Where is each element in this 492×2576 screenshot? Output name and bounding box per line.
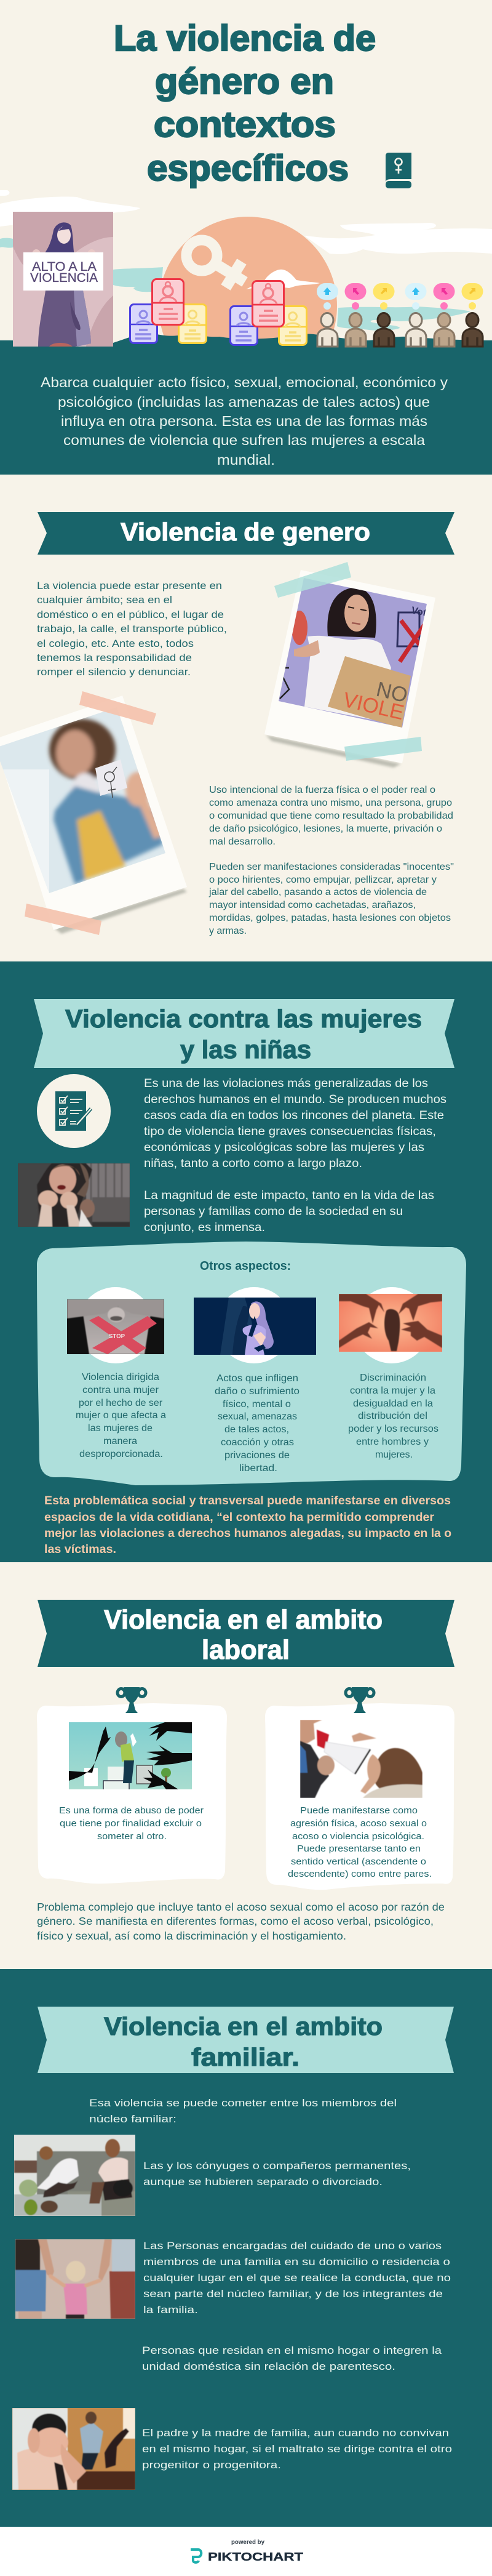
panel: violencia en el ambito laboral <box>37 1600 454 1941</box>
text block: violaciones: económicas y psicológicas sobre las mujeres y las <box>144 1141 424 1154</box>
photo: polaroid woman with no violence sign <box>264 562 437 768</box>
text block: definicion: de daño psicológico, lesiones, la muerte, privación o <box>209 824 442 834</box>
caption: desigualdad en la <box>353 1398 433 1409</box>
clouds and background bands <box>0 190 492 331</box>
caption: coacción y otras <box>221 1437 294 1448</box>
title <box>114 18 376 188</box>
person 4 with bubble <box>405 283 427 347</box>
banner heading <box>34 999 454 1068</box>
caption: las mujeres de <box>88 1423 153 1434</box>
caption: Actos que infligen <box>216 1373 298 1384</box>
icon group: identity cards right <box>230 281 308 345</box>
caption: agresión física, acoso sexual o <box>290 1818 427 1829</box>
person 2 with bubble <box>344 283 367 347</box>
text block: padre y madre: en el mismo hogar, si el maltrato se dirige contra el otro <box>142 2443 452 2455</box>
text block: violaciones: La magnitud de este impacto, tanto en la vida de las <box>144 1189 434 1202</box>
text block: violaciones: niñas, tanto a corto como a largo plazo. <box>144 1157 362 1170</box>
text block: violaciones: tipo de violencia tiene graves consecuencias físicas, <box>144 1125 436 1138</box>
person 1 with bubble <box>317 283 338 347</box>
caption <box>59 1805 204 1842</box>
banner heading: Violencia en el ambito <box>104 2012 383 2040</box>
text block: definicion: y armas. <box>209 926 247 936</box>
person 5 with bubble <box>433 283 455 347</box>
banner heading: familiar. <box>191 2043 300 2071</box>
footer: powered by piktochart <box>0 2527 492 2576</box>
caption: entre hombres y <box>356 1437 429 1447</box>
intro text: influya en otra persona. Esta es una de las formas más <box>61 413 427 429</box>
text block: violaciones: personas y familias como de la sociedad en su <box>144 1205 403 1218</box>
photo: polaroid woman with no violence sign: Vot <box>410 605 427 619</box>
caption: Puede manifestarse como <box>300 1805 418 1816</box>
caption: descendente) como entre pares. <box>288 1869 432 1879</box>
text block: ambitos <box>37 580 227 678</box>
intro text: Abarca cualquier acto físico, sexual, emocional, económico y <box>41 374 448 390</box>
text block: personas encargadas: la familia. <box>143 2304 198 2316</box>
photo: polaroid woman with no violence sign: NO <box>374 678 410 707</box>
text block: problema complejo: físico y sexual, así como la discriminación y el hostigamiento. <box>37 1930 346 1942</box>
poster: alto a la violencia: ALTO A LA <box>32 260 97 274</box>
photo: stop gagged woman <box>67 1299 164 1354</box>
photo: polaroid blurred woman with denim jacket <box>0 691 187 935</box>
text block: definicion: como amenaza contra uno mismo, una persona, grupo <box>209 798 452 808</box>
card: abuso de poder <box>37 1687 227 1884</box>
title: específicos <box>147 148 349 188</box>
intro text: comunes de violencia que sufren las mujeres a escala <box>63 432 425 448</box>
text block: definicion: mordidas, golpes, patadas, hasta lesiones con objetos <box>209 913 451 923</box>
caption: de tales actos, <box>224 1424 289 1435</box>
icon: book with female symbol <box>386 153 411 188</box>
caption: mujer o que afecta a <box>76 1410 166 1421</box>
text block: unidad domestica <box>142 2345 442 2372</box>
caption: acoso o violencia psicológica. <box>292 1831 424 1842</box>
text block: violaciones: conjunto, es inmensa. <box>144 1221 265 1234</box>
ground <box>0 333 492 475</box>
text block: problema complejo: Problema complejo que incluye tanto el acoso sexual como el acoso por razón de <box>37 1901 445 1913</box>
text block: definicion: mal desarrollo. <box>209 837 276 847</box>
caption <box>288 1805 432 1879</box>
caption: Es una forma de abuso de poder <box>59 1805 204 1816</box>
card: agresion <box>265 1687 454 1890</box>
text block: unidad domestica: Personas que residan en el mismo hogar o integren la <box>142 2345 442 2356</box>
banner heading: laboral <box>202 1635 290 1665</box>
panel: hero <box>0 23 492 475</box>
caption: sexual, amenazas <box>218 1411 297 1422</box>
text block: definicion: jalar del cabello, pasando a actos de violencia de <box>208 887 427 897</box>
text block: conyuges <box>143 2160 411 2188</box>
banner heading: Violencia de genero <box>121 518 370 546</box>
text block: definicion: Uso intencional de la fuerza física o el poder real o <box>209 785 435 795</box>
tape bottom <box>25 904 101 935</box>
intro text: psicológico (incluidas las amenazas de tales actos) que <box>58 394 430 410</box>
text block: padre y madre <box>142 2427 452 2471</box>
caption: físico, mental o <box>223 1399 291 1410</box>
intro text: mundial. <box>217 452 275 468</box>
photo: polaroid woman with no violence sign: VIOLE <box>341 688 406 724</box>
caption <box>76 1372 166 1459</box>
caption: privaciones de <box>224 1450 290 1461</box>
photo: crying child covering ears <box>12 2408 135 2490</box>
banner heading: Violencia en el ambito <box>104 1605 383 1635</box>
panel: otros aspectos <box>37 1242 466 1485</box>
text block: personas encargadas: sean parte del núcleo familiar, y de los integrantes de <box>143 2288 443 2300</box>
caption: mujeres. <box>375 1450 413 1460</box>
callout: problematica social: las víctimas. <box>44 1543 116 1556</box>
panel: violencia contra las mujeres y las niñas <box>0 961 492 1562</box>
icon group: people with speech bubbles <box>317 283 483 347</box>
text block: nucleo familiar <box>89 2097 397 2125</box>
caption: manera <box>103 1436 137 1446</box>
text block: padre y madre: El padre y la madre de familia, aun cuando no convivan <box>142 2427 449 2439</box>
illustration: hands reaching toward woman <box>339 1294 442 1352</box>
icon: checklist in circle <box>37 1074 111 1148</box>
caption: que tiene por finalidad excluir o <box>60 1818 202 1829</box>
poster: alto a la violencia <box>13 212 113 347</box>
photo: frightened child <box>18 1163 130 1227</box>
icon: trophy <box>346 1687 374 1713</box>
illustration: office hands <box>69 1722 192 1793</box>
callout: problematica social: Esta problemática social y transversal puede manifestarse en diversos <box>44 1495 451 1507</box>
text block: ambitos: tenemos la responsabilidad de <box>37 652 192 664</box>
callout: problematica social: espacios de la vida cotidiana, “el contexto ha permitido comprender <box>44 1511 435 1524</box>
card: discriminacion <box>339 1287 442 1460</box>
title: género en <box>155 62 334 102</box>
intro text <box>41 374 448 468</box>
text block: ambitos: trabajo, la calle, el transporte público, <box>37 623 227 635</box>
text block: nucleo familiar: Esa violencia se puede cometer entre los miembros del <box>89 2097 397 2109</box>
text block: ambitos: doméstico o en el público, el lugar de <box>37 609 224 620</box>
caption: por el hecho de ser <box>79 1398 162 1408</box>
text block: personas encargadas: Las Personas encargadas del cuidado de uno o varios <box>143 2240 442 2252</box>
banner heading <box>38 512 454 555</box>
footer caption: powered by <box>231 2539 264 2546</box>
text block: violaciones: derechos humanos en el mundo. Se producen muchos <box>144 1093 446 1106</box>
title: La violencia de <box>114 18 376 58</box>
caption <box>348 1373 438 1460</box>
icon: piktochart logo <box>191 2550 201 2562</box>
caption: Violencia dirigida <box>82 1372 159 1382</box>
caption: daño o sufrimiento <box>215 1386 300 1397</box>
person 3 with bubble <box>373 283 395 347</box>
caption: distribución del <box>358 1411 427 1421</box>
text block: conyuges: aunque se hubieren separado o divorciado. <box>143 2176 383 2188</box>
photo: man shouting with megaphone <box>300 1720 423 1798</box>
illustration: woman silenced by shadow <box>194 1298 316 1355</box>
tape top <box>79 691 156 725</box>
text block: personas encargadas <box>143 2240 451 2316</box>
title: contextos <box>154 105 336 145</box>
photo: couple on sofa <box>14 2135 135 2216</box>
text block: ambitos: La violencia puede estar presente en <box>37 580 222 592</box>
caption: desproporcionada. <box>79 1449 163 1459</box>
tape top <box>274 562 351 598</box>
text block: definicion: mayor intensidad como cachetadas, arañazos, <box>209 900 416 910</box>
card: actos <box>194 1287 316 1474</box>
callout: problematica social: mejor las violaciones a derechos humanos alegadas, su impacto en la o <box>44 1527 451 1540</box>
banner heading: y las niñas <box>180 1035 311 1064</box>
caption: sentido vertical (ascendente o <box>291 1856 426 1867</box>
banner heading <box>38 1600 454 1667</box>
caption: contra una mujer <box>82 1385 159 1395</box>
text block: personas encargadas: cualquier lugar en el que se realice la conducta, que no <box>143 2272 451 2284</box>
banner heading <box>38 2007 454 2073</box>
callout: problematica social <box>44 1495 451 1556</box>
caption: Puede presentarse tanto en <box>297 1844 421 1854</box>
icon: trophy <box>117 1687 146 1713</box>
text block: problema complejo: género. Se manifiesta en diferentes formas, como el acoso verbal, psicológico, <box>37 1915 434 1927</box>
text block: problema complejo <box>37 1901 445 1942</box>
text block: violaciones: casos cada día en todos los rincones del planeta. Este <box>144 1109 444 1122</box>
text block: ambitos: romper el silencio y denunciar. <box>37 666 191 678</box>
photo: parents holding child hands <box>15 2239 135 2319</box>
person 6 with bubble <box>461 283 483 347</box>
text block: unidad domestica: unidad doméstica sin relación de parentesco. <box>142 2361 395 2372</box>
poster: alto a la violencia: VIOLENCIA <box>30 271 98 285</box>
panel: violencia de genero <box>0 512 454 936</box>
text block: violaciones <box>144 1077 446 1234</box>
text block: definicion: Pueden ser manifestaciones consideradas "inocentes" <box>209 862 454 872</box>
text block: violaciones: Es una de las violaciones más generalizadas de los <box>144 1077 428 1090</box>
text block: nucleo familiar: núcleo familiar: <box>89 2113 177 2125</box>
caption: Discriminación <box>360 1373 426 1383</box>
caption <box>215 1373 300 1474</box>
sun with female symbol <box>159 217 337 395</box>
tape bottom <box>344 737 422 761</box>
icon group: identity cards left <box>130 279 207 343</box>
banner heading: Violencia contra las mujeres <box>65 1005 422 1033</box>
panel: violencia en el ambito familiar <box>0 1969 492 2527</box>
card: violencia dirigida <box>67 1287 166 1459</box>
caption: someter al otro. <box>97 1831 167 1842</box>
text block: ambitos: el colegio, etc. Ante esto, todos <box>37 638 194 649</box>
photo: stop gagged woman: STOP <box>109 1333 125 1340</box>
heading: otros aspectos: Otros aspectos: <box>200 1259 291 1273</box>
caption: libertad. <box>239 1463 277 1474</box>
text block: ambitos: cualquier ámbito; sea en el <box>37 594 172 606</box>
text block: conyuges: Las y los cónyuges o compañeros permanentes, <box>143 2160 411 2172</box>
text block: padre y madre: progenitor o progenitora. <box>142 2459 281 2471</box>
caption: contra la mujer y la <box>350 1386 435 1396</box>
text block: definicion <box>208 785 454 936</box>
caption: poder y los recursos <box>348 1424 438 1434</box>
text block: personas encargadas: miembros de una familia en su domicilio o residencia o <box>143 2256 450 2268</box>
text block: definicion: o comunidad que tiene como resultado la probabilidad <box>209 811 453 821</box>
text block: definicion: o poco hirientes, como empujar, pellizcar, apretar y <box>209 875 437 885</box>
footer wordmark: PIKTOCHART <box>208 2551 303 2563</box>
